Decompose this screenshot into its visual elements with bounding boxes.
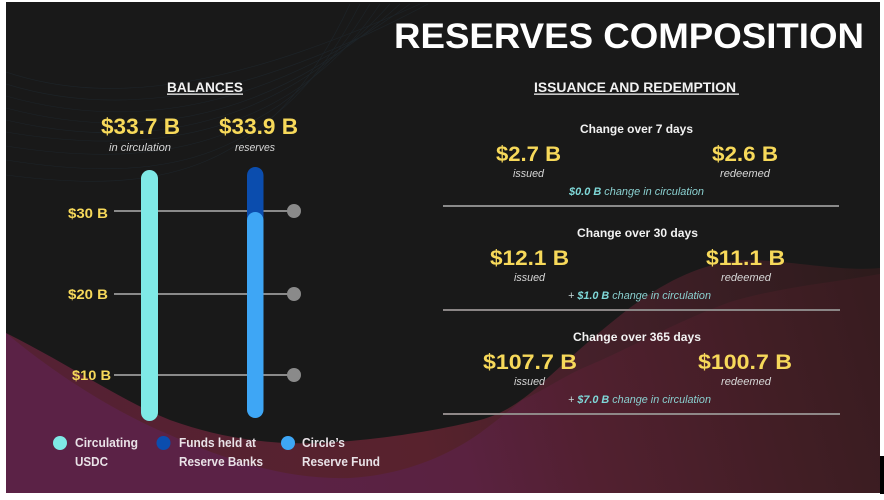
balances heading: BALANCES: [167, 80, 243, 95]
section: 7 days: $2.7 B: [496, 143, 561, 166]
section: 30 days: [443, 226, 840, 311]
section: 365 days: [443, 330, 840, 415]
corner block: [880, 456, 884, 494]
title: RESERVES COMPOSITION: [394, 17, 864, 56]
section: 7 days: redeemed: [720, 168, 771, 180]
section: 365 days: $107.7 B: [483, 351, 577, 374]
purple wave: [6, 274, 880, 493]
legend: Circulating: [75, 436, 138, 450]
section: 365 days: $100.7 B: [698, 351, 792, 374]
circulation total: [101, 114, 180, 154]
section: 365 days: Change over 365 days: [573, 330, 701, 344]
bar: circulating USDC: [141, 170, 158, 421]
panel: issuance and redemption: [443, 80, 840, 415]
legend: [53, 436, 380, 469]
axis labels: $20 B: [68, 286, 108, 302]
legend: Reserve Banks: [179, 455, 263, 469]
axis gridlines: [114, 204, 301, 382]
legend: Reserve Fund: [302, 455, 380, 469]
section: 30 days: Change over 30 days: [577, 226, 698, 240]
circulation total: in circulation: [109, 142, 171, 154]
section: 30 days: $12.1 B: [490, 247, 569, 270]
contour line pattern: [6, 4, 428, 181]
axis labels: [68, 205, 111, 383]
section: 7 days: $0.0 B change in circulation: [568, 186, 704, 198]
panel: balances: [53, 80, 380, 469]
axis labels: $10 B: [72, 367, 111, 383]
section: 7 days: $2.6 B: [712, 143, 778, 166]
reserves total: $33.9 B: [219, 114, 298, 139]
section: 365 days: + $7.0 B change in circulation: [568, 394, 711, 406]
section: 7 days: Change over 7 days: [580, 122, 693, 136]
circulation total: $33.7 B: [101, 114, 180, 139]
legend: Circle’s: [302, 436, 345, 450]
section: 30 days: + $1.0 B change in circulation: [568, 290, 711, 302]
section: 30 days: issued: [514, 272, 546, 284]
section: 7 days: [443, 122, 839, 207]
reserves total: reserves: [235, 142, 275, 154]
section: 30 days: $11.1 B: [706, 247, 785, 270]
bar: reserves: [247, 167, 264, 418]
legend: USDC: [75, 455, 108, 469]
issuance heading: ISSUANCE AND REDEMPTION: [534, 80, 736, 95]
legend: Funds held at: [179, 436, 257, 450]
dark red wave: [6, 260, 880, 493]
reserves total: [219, 114, 298, 154]
section: 7 days: issued: [513, 168, 545, 180]
section: 30 days: redeemed: [721, 272, 772, 284]
section: 365 days: issued: [514, 376, 546, 388]
section: 365 days: redeemed: [721, 376, 772, 388]
axis labels: $30 B: [68, 205, 108, 221]
